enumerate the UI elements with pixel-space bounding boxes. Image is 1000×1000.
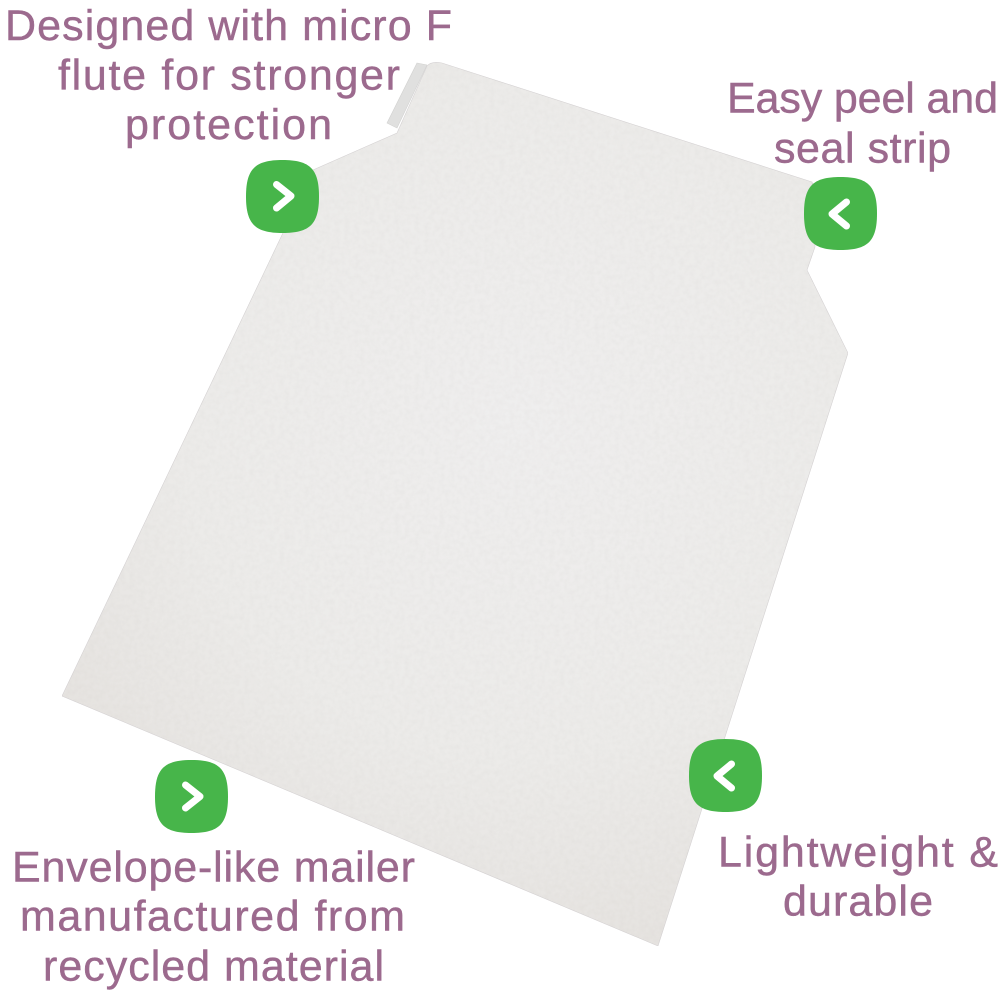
callout text: micro F flute: Designed with micro F — [5, 2, 452, 50]
callout text: peel and seal: Easy peel and — [727, 74, 998, 122]
callout text: micro F flute: flute for stronger — [58, 52, 400, 100]
callout text: lightweight: Lightweight & — [718, 828, 998, 876]
icon: right arrow button top left — [246, 160, 319, 233]
icon: right arrow button bottom left — [155, 760, 228, 833]
callout text: peel and seal — [727, 74, 998, 172]
callout text: lightweight — [718, 828, 998, 926]
peel and seal strip at top left — [387, 63, 427, 128]
callout text: recycled material — [12, 844, 415, 990]
callout text: micro F flute — [5, 2, 452, 149]
callout text: peel and seal: seal strip — [774, 124, 951, 172]
callout text: lightweight: durable — [783, 878, 933, 926]
callout text: micro F flute: protection — [125, 101, 332, 149]
icon: left arrow button top right — [804, 177, 877, 250]
callout text: recycled material: recycled material — [43, 942, 384, 990]
icon: left arrow button bottom right — [689, 739, 762, 812]
mailer envelope — [62, 62, 848, 946]
callout text: recycled material: Envelope-like mailer — [12, 844, 415, 892]
callout text: recycled material: manufactured from — [20, 892, 405, 940]
peel and seal strip at right — [807, 182, 820, 270]
